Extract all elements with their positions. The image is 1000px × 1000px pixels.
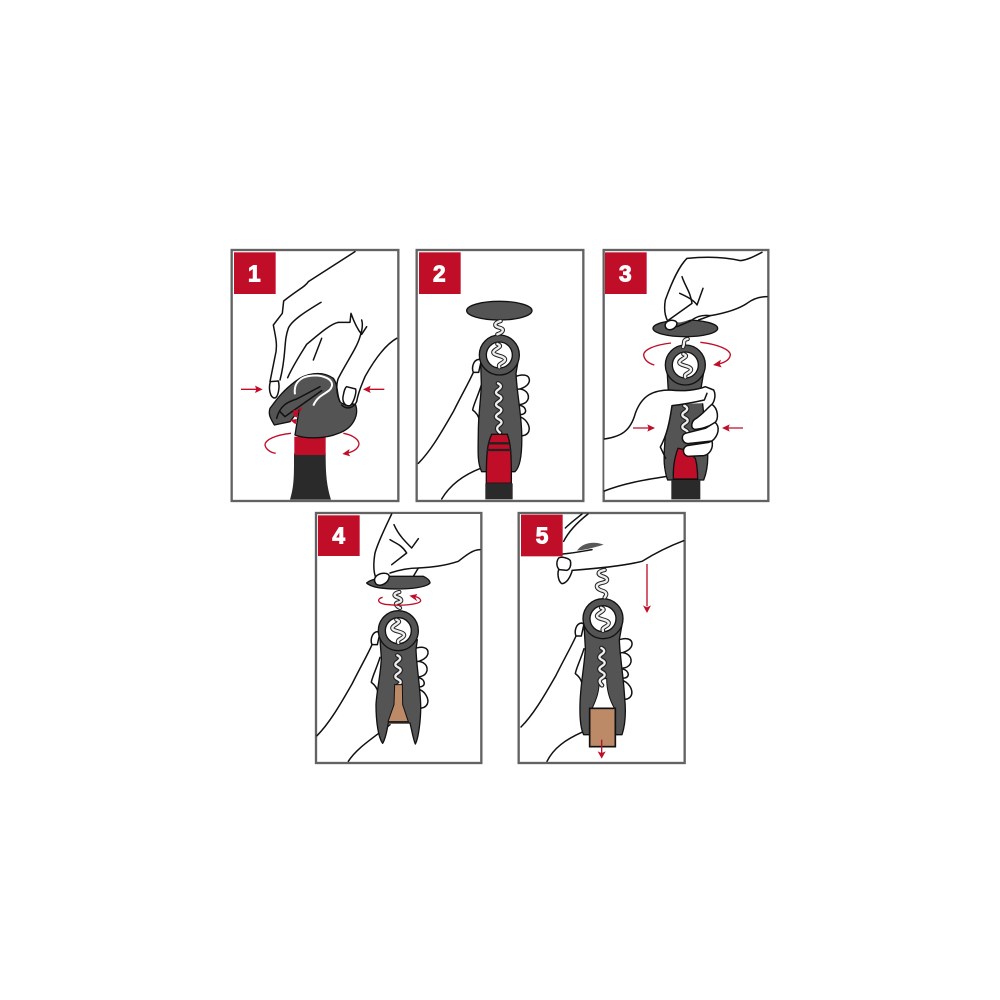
bottle <box>290 453 331 500</box>
step badge 1: 1 <box>248 260 261 286</box>
hand <box>557 514 684 584</box>
panel 1: remove foil with cutter <box>232 250 398 501</box>
upper hand <box>374 514 480 580</box>
spiral <box>683 339 688 347</box>
lower hand <box>604 387 718 491</box>
bottle with red foil <box>485 434 513 499</box>
corkscrew legs <box>376 640 421 744</box>
worm <box>496 383 502 433</box>
compress arrows <box>241 386 384 393</box>
spiral <box>495 321 503 334</box>
rotation arrows <box>265 433 359 456</box>
panel 2: place corkscrew on bottle <box>417 250 583 501</box>
corkscrew ring <box>665 345 705 385</box>
step badge 3 <box>605 252 647 294</box>
red foil band <box>294 437 326 455</box>
corkscrew body <box>478 362 522 472</box>
compress arrows <box>633 424 743 432</box>
panel frame <box>417 250 583 501</box>
cork arrow <box>598 740 606 759</box>
step badge 4 <box>318 515 360 556</box>
rotation arrow <box>379 594 421 605</box>
handle sliver <box>577 543 604 551</box>
fingertip <box>374 573 389 585</box>
corkscrew ring <box>583 599 623 639</box>
step badge 5 <box>521 515 563 556</box>
step badge 1 <box>234 252 276 294</box>
panel frame <box>604 250 768 501</box>
panel 3: turn handle while gripping <box>604 250 768 501</box>
step badge 4: 4 <box>332 523 345 549</box>
panel 5: cork released <box>519 513 685 763</box>
cork <box>388 685 408 722</box>
top handle <box>367 576 430 589</box>
step badge 2 <box>419 252 461 294</box>
corkscrew body <box>664 368 708 480</box>
panel frame <box>519 513 685 763</box>
red foil and bottle <box>671 448 700 499</box>
cork <box>590 708 615 747</box>
corkscrew ring <box>378 611 418 651</box>
top handle <box>653 320 718 337</box>
panel frame <box>232 250 398 501</box>
step badge 3: 3 <box>619 260 632 286</box>
top handle <box>467 301 532 320</box>
panel 4: cork rising <box>316 513 481 763</box>
white wire <box>295 375 332 406</box>
step badge 5: 5 <box>536 523 548 549</box>
hand <box>270 252 397 408</box>
worm <box>682 406 688 436</box>
down arrow <box>643 564 651 613</box>
foil cutter <box>269 374 357 438</box>
hand <box>418 359 529 499</box>
rotation arrows <box>644 342 730 367</box>
spiral <box>597 570 607 597</box>
hand <box>317 632 428 761</box>
corkscrew body <box>580 625 625 735</box>
step badge 2: 2 <box>433 260 446 286</box>
cutter detail <box>277 387 322 418</box>
worm <box>395 655 401 685</box>
spiral <box>395 592 401 608</box>
upper hand <box>665 252 767 330</box>
slot and worm <box>592 648 615 709</box>
panel frame <box>316 513 481 763</box>
corkscrew ring <box>479 335 519 375</box>
hand <box>521 623 632 761</box>
